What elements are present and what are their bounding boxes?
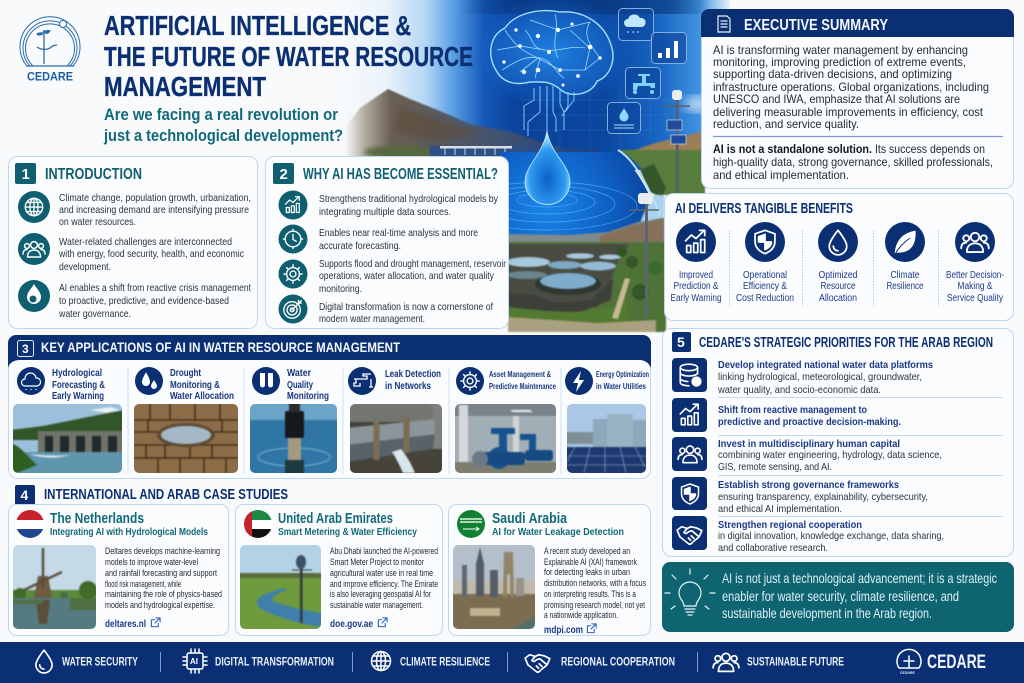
- footer: regional cooperation: REGIONAL COOPERATION: [561, 654, 675, 668]
- footer: CEDARE logo: [897, 649, 986, 675]
- case study: United Arab Emirates: Smart Metering & Water Efficiency: [278, 526, 417, 538]
- benefit: climate resilience: Resilience: [886, 281, 924, 292]
- panel: key applications: [8, 335, 651, 478]
- subtitle: [103, 106, 343, 145]
- panel: introduction: [8, 156, 258, 328]
- text: real time: accurate forecasting.: [319, 241, 401, 252]
- water drop: [525, 131, 570, 204]
- flag: UAE: [244, 510, 272, 539]
- priority: human capital: [672, 437, 942, 473]
- application: water quality: Water: [287, 368, 311, 379]
- title: MANAGEMENT: [104, 71, 266, 102]
- link: doe.gov.ae: doe.gov.ae: [330, 618, 373, 630]
- benefit: climate resilience: [885, 222, 925, 292]
- heading: case studies: [15, 485, 288, 505]
- case text: Netherlands: models and hydrological expertise.: [105, 600, 215, 610]
- icon: people: [18, 233, 50, 265]
- footer: sustainable future: [713, 653, 844, 671]
- text: interconnected: [58, 237, 244, 273]
- hero icon: water level: [608, 102, 640, 134]
- heading: priorities: 5: [677, 334, 685, 350]
- text: shift: AI enables a shift from reactive crisis management: [59, 283, 251, 294]
- case text: Saudi Arabia: distribution networks, with a focus: [544, 578, 646, 588]
- hero illustration: brain, water drop, lake, treatment plant: [340, 0, 730, 332]
- application: leak detection: in Networks: [385, 381, 431, 392]
- heading: why AI: WHY AI HAS BECOME ESSENTIAL?: [303, 166, 498, 183]
- application: water quality: Quality: [287, 380, 313, 391]
- case study: United Arab Emirates: United Arab Emirates: [278, 511, 393, 527]
- heading: why AI: [273, 163, 498, 184]
- summary body: delivering measurable improvements in efficiency, cost: [713, 105, 984, 119]
- application: hydrological forecasting: [10, 367, 125, 476]
- footer: CEDARE logo: CEDARE: [927, 652, 986, 673]
- summary body: infrastructure operations. Global organizations, including: [713, 80, 989, 94]
- application: leak detection: [346, 367, 446, 476]
- summary body: [713, 43, 989, 131]
- benefit: prediction: Improved: [679, 270, 713, 281]
- subtitle: just a technological development?: [103, 127, 343, 145]
- text: digital transformation: modern water management.: [319, 314, 425, 325]
- priority: data platforms: [672, 358, 933, 396]
- panel: executive summary: [701, 9, 1014, 188]
- benefit: efficiency: Cost Reduction: [736, 293, 794, 304]
- priority: cooperation: in digital innovation, knowledge exchange, data sharing,: [718, 531, 944, 542]
- link: deltares.nl: deltares.nl: [105, 618, 146, 630]
- callout text: sustainable development in the Arab region.: [722, 605, 932, 621]
- application: water quality: Monitoring: [287, 391, 329, 402]
- hero icon: bars: [652, 32, 686, 64]
- application: asset management: Predictive Maintenance: [489, 381, 556, 391]
- case text: Saudi Arabia: [544, 546, 646, 620]
- mountains: [345, 89, 705, 198]
- priority: human capital: combining water engineering, hydrology, data science,: [718, 450, 942, 461]
- text: real time: [319, 228, 478, 252]
- heading: introduction: 1: [22, 166, 30, 183]
- summary body: supporting data-driven decisions, and optimizing: [713, 67, 952, 81]
- heading: case studies: INTERNATIONAL AND ARAB CASE STUDIES: [44, 487, 288, 503]
- link: mdpi.com: mdpi.com: [544, 624, 583, 636]
- text: interconnected: with energy, food security, health, and economic: [58, 249, 244, 260]
- application: hydrological forecasting: Hydrological: [52, 368, 102, 379]
- brain network: [491, 11, 613, 94]
- lake: [500, 152, 664, 240]
- application: drought monitoring: Drought: [170, 368, 202, 379]
- flag: Netherlands: [16, 510, 44, 539]
- case text: UAE: [330, 546, 438, 610]
- case study: Saudi Arabia: Saudi Arabia: [492, 511, 568, 527]
- application: asset management: [451, 367, 560, 476]
- case study: United Arab Emirates: [236, 504, 442, 636]
- priority: cooperation: Strengthen regional cooperation: [718, 520, 862, 531]
- case study: the Netherlands: Integrating AI with Hydrological Models: [50, 526, 208, 538]
- footer: water security: [36, 650, 138, 673]
- treatment plant: [506, 242, 666, 332]
- footer: sustainable future: SUSTAINABLE FUTURE: [747, 654, 844, 668]
- benefit: efficiency: Operational: [743, 270, 787, 281]
- applications header: [8, 335, 651, 368]
- case text: Saudi Arabia: A recent study developed an: [544, 546, 630, 556]
- application: energy optimization: [563, 367, 650, 476]
- application: energy optimization: Energy Optimization: [596, 369, 649, 379]
- photo: canal with smart meter: [240, 545, 321, 629]
- benefit: prediction: [670, 222, 722, 304]
- benefit: decision making: [946, 222, 1004, 304]
- heading: priorities: [672, 332, 993, 352]
- priority: proactive decisions: [672, 398, 901, 432]
- text: strengthens: Strengthens traditional hydrological models by: [319, 194, 499, 205]
- summary body: UNESCO and IWA, emphasize that AI solutions are: [713, 92, 960, 106]
- summary body: reduction, and service quality.: [713, 117, 859, 131]
- case text: Saudi Arabia: a nationwide application.: [544, 610, 618, 620]
- case text: UAE: Smart Meter Project to monitor: [330, 557, 424, 567]
- priority: proactive decisions: predictive and proactive decision-making.: [718, 417, 901, 428]
- photo: windmill: [13, 545, 96, 629]
- photo: Riyadh skyline: [453, 545, 535, 629]
- application: leak detection: Leak Detection: [385, 369, 441, 380]
- priority: cooperation: and collaborative research.: [718, 543, 828, 554]
- icon: clock: [278, 224, 308, 254]
- logo: CEDARE: [20, 17, 80, 84]
- case text: Netherlands: flood risk management, while: [105, 579, 181, 589]
- benefit: efficiency: [736, 222, 794, 304]
- benefit: decision making: Better Decision-: [946, 270, 1004, 281]
- priority: cooperation: [672, 516, 944, 554]
- summary key message: and ethical implementation.: [713, 168, 849, 182]
- panel: why AI has become essential: [266, 156, 508, 328]
- callout text: enabler for water security, climate resilience, and: [722, 588, 959, 604]
- hero icon: tap: [626, 68, 660, 98]
- title: ARTIFICIAL INTELLIGENCE &: [104, 10, 411, 41]
- footer: digital transformation: [183, 649, 334, 673]
- summary key message: [713, 142, 993, 182]
- case text: Netherlands: [105, 546, 222, 610]
- summary header: [701, 9, 1014, 37]
- priority: human capital: Invest in multidisciplinary human capital: [718, 439, 900, 450]
- icon: gear: [278, 260, 308, 288]
- summary key message: AI is not a standalone solution.: [713, 142, 872, 156]
- icon: light bulb: [665, 569, 715, 615]
- distant hills: [508, 218, 664, 248]
- case text: Saudi Arabia: Explainable AI (XAI) framework: [544, 557, 637, 567]
- case text: UAE: sustainable water management.: [330, 600, 423, 610]
- summary key message: high-quality data, strong governance, skilled professionals,: [713, 155, 993, 169]
- footer: water security: WATER SECURITY: [62, 654, 138, 668]
- benefit: efficiency: Efficiency &: [743, 281, 787, 292]
- case text: Netherlands: Deltares develops machine-learning: [105, 546, 220, 556]
- heading: introduction: [15, 163, 142, 184]
- logo: CEDARE: CEDARE: [27, 70, 73, 84]
- case study: the Netherlands: [8, 504, 228, 636]
- benefit: allocation: Allocation: [819, 293, 857, 304]
- text: shift: water governance.: [58, 309, 131, 320]
- summary body: monitoring, improving prediction of extreme events,: [713, 55, 966, 69]
- heading: introduction: INTRODUCTION: [45, 166, 142, 183]
- icon: chart: [278, 190, 308, 220]
- footer: climate resilience: CLIMATE RESILIENCE: [400, 654, 490, 668]
- text: digital transformation: Digital transformation is now a cornerstone of: [319, 302, 493, 313]
- application: asset management: Asset Management &: [489, 369, 551, 379]
- icon: target: [278, 294, 308, 324]
- footer: climate resilience: [372, 652, 490, 670]
- text: shift: to proactive, predictive, and evidence-based: [59, 296, 229, 307]
- case study: Saudi Arabia: AI for Water Leakage Detection: [492, 526, 624, 538]
- hero icon: cloud data: [618, 8, 654, 40]
- heading: case studies: 4: [20, 487, 28, 503]
- case study: the Netherlands: The Netherlands: [50, 511, 144, 527]
- benefit: climate resilience: Climate: [890, 270, 920, 281]
- callout text: [722, 570, 997, 621]
- text: supports: [319, 259, 506, 295]
- application: water quality: [250, 367, 337, 473]
- text: pressure: [59, 193, 251, 228]
- footer: CEDARE logo: CEDARE: [900, 671, 915, 675]
- heading: why AI: 2: [280, 166, 288, 183]
- case text: UAE: and improve efficiency. The Emirate: [330, 579, 438, 589]
- case text: UAE: Abu Dhabi launched the AI-powered: [330, 546, 438, 556]
- text: strengthens: [319, 194, 499, 218]
- title: THE FUTURE OF WATER RESOURCE: [104, 41, 473, 72]
- case text: Netherlands: and rainfall forecasting and support: [105, 568, 217, 578]
- footer: regional cooperation: [525, 654, 675, 672]
- benefit: allocation: Resource: [820, 281, 856, 292]
- benefit: prediction: Early Warning: [670, 293, 722, 304]
- icon: globe: [18, 191, 50, 223]
- priority: proactive decisions: Shift from reactive management to: [718, 405, 867, 416]
- text: interconnected: development.: [59, 262, 111, 273]
- hero sky: [340, 0, 730, 170]
- benefit: decision making: Service Quality: [947, 293, 1003, 304]
- benefit: allocation: [818, 222, 858, 304]
- priority: governance: [672, 477, 928, 515]
- application: hydrological forecasting: Early Warning: [52, 391, 104, 402]
- text: pressure: on water resources.: [59, 217, 136, 228]
- benefit: allocation: Optimized: [818, 270, 858, 281]
- sensor poles: [629, 90, 690, 317]
- text: digital transformation: [319, 302, 493, 325]
- case text: Netherlands: maintaining the role of physics-based: [105, 589, 222, 599]
- case text: Saudi Arabia: for detecting leaks in urban: [544, 567, 630, 577]
- subtitle: Are we facing a real revolution or: [104, 106, 339, 124]
- panel: benefits of AI: [664, 194, 1014, 320]
- application: energy optimization: in Water Utilities: [596, 381, 646, 391]
- case text: Saudi Arabia: promising research model, not yet: [544, 600, 645, 610]
- priority: data platforms: linking hydrological, meteorological, groundwater,: [718, 372, 922, 383]
- text: real time: Enables near real-time analysis and more: [319, 228, 478, 239]
- title: [104, 10, 473, 102]
- case text: Saudi Arabia: on interpreting results. This is a: [544, 589, 636, 599]
- application: drought monitoring: Water Allocation: [170, 391, 234, 402]
- text: shift: [58, 283, 251, 320]
- priority: governance: Establish strong governance frameworks: [718, 480, 899, 491]
- priority: governance: ensuring transparency, explainability, cybersecurity,: [718, 492, 928, 503]
- summary body: AI is transforming water management by enhancing: [713, 43, 968, 57]
- priority: data platforms: water quality, and socio-economic data.: [717, 385, 881, 396]
- summary key message: Its success depends on: [875, 142, 985, 156]
- benefit: decision making: Making &: [958, 281, 993, 292]
- summary header: EXECUTIVE SUMMARY: [744, 17, 889, 34]
- applications header: KEY APPLICATIONS OF AI IN WATER RESOURCE MANAGEMENT: [41, 339, 400, 355]
- callout: strategic enabler: [662, 562, 1014, 632]
- flag: Saudi Arabia: [457, 510, 485, 538]
- priority: data platforms: Develop integrated national water data platforms: [718, 360, 933, 371]
- text: strengthens: integrating multiple data sources.: [319, 207, 451, 218]
- text: supports: Supports flood and drought management, reservoir: [319, 259, 506, 270]
- case text: UAE: agricultural water use in real time: [330, 568, 433, 578]
- case text: UAE: is also leveraging geospatial AI for: [330, 589, 431, 599]
- footer band: [0, 642, 1024, 683]
- footer: digital transformation: DIGITAL TRANSFORMATION: [215, 654, 334, 668]
- applications header: 3: [22, 342, 29, 356]
- case study: Saudi Arabia: [448, 504, 650, 636]
- icon: drop: [18, 280, 50, 312]
- circuit traces: [524, 86, 574, 136]
- application: drought monitoring: [130, 367, 242, 476]
- application: drought monitoring: Monitoring &: [170, 380, 220, 391]
- priority: human capital: GIS, remote sensing, and AI.: [718, 462, 832, 473]
- benefit: prediction: Prediction &: [674, 281, 719, 292]
- text: supports: operations, water allocation, and water quality: [319, 271, 495, 282]
- case text: Netherlands: models to improve water-level: [105, 557, 198, 567]
- text: supports: monitoring.: [319, 284, 362, 295]
- footer: digital transformation: AI: [190, 657, 198, 666]
- heading: benefits: AI DELIVERS TANGIBLE BENEFITS: [675, 201, 853, 217]
- application: hydrological forecasting: Forecasting &: [52, 380, 105, 391]
- panel: strategic priorities: [662, 328, 1014, 556]
- text: interconnected: Water-related challenges are interconnected: [59, 237, 232, 248]
- priority: governance: and ethical AI implementation.: [718, 504, 842, 515]
- text: pressure: and increasing demand are intensifying pressure: [59, 205, 249, 216]
- text: pressure: Climate change, population growth, urbanization,: [59, 193, 251, 204]
